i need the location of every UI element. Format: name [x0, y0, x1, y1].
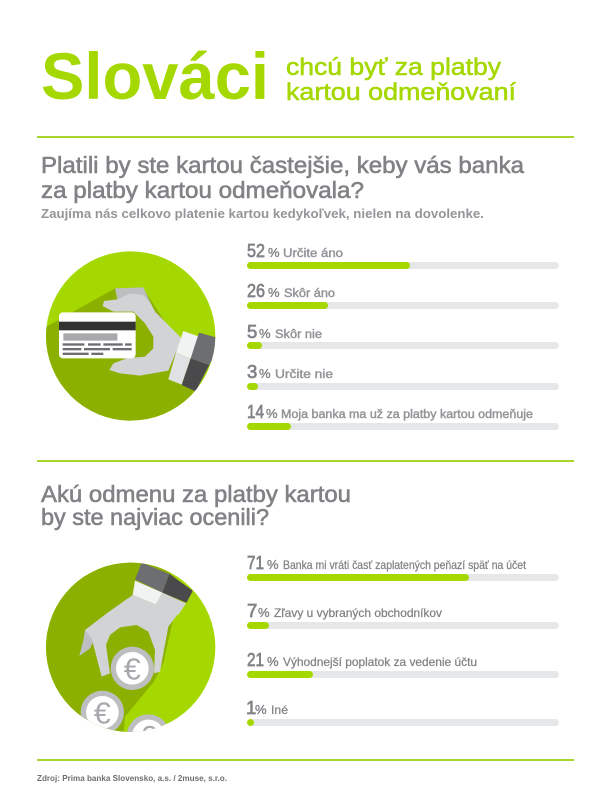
icon: euro coin 3: [127, 714, 166, 732]
icon: euro coin 2: €: [94, 696, 111, 730]
bar: 3 % Určite nie: 3: [247, 361, 257, 382]
chart: question 1 results: [247, 240, 559, 430]
bar: 26 % Skôr áno: Skôr áno: [284, 288, 335, 300]
bar: 1 % Iné: 1: [246, 697, 256, 718]
bar: 52 % Určite áno: 52: [247, 240, 265, 261]
bar: 7 % Zľavy u vybraných obchodníkov: %: [258, 605, 270, 620]
bar: 7 % Zľavy u vybraných obchodníkov: Zľavy u vybraných obchodníkov: [274, 606, 442, 620]
icon: hand holding card: [46, 251, 216, 421]
title: kartou odmeňovaní: [286, 79, 516, 106]
bar: 71 % Banka mi vráti časť zaplatených peňazí späť na účet: %: [267, 557, 279, 572]
bar: 14 % Moja banka ma už za platby kartou odmeňuje: Moja banka ma už za platby kartou odmeňuje: [281, 409, 533, 421]
bar: 1 % Iné: [246, 697, 559, 726]
bar: 7 % Zľavy u vybraných obchodníkov: 7: [247, 600, 257, 621]
source note: Zdroj: Prima banka Slovensko, a.s. / 2muse, s.r.o.: [37, 773, 227, 783]
bar: 3 % Určite nie: [247, 361, 559, 390]
bar: 1 % Iné: %: [255, 702, 267, 717]
subheading: question 1 note: Zaujíma nás celkovo platenie kartou kedykoľvek, nielen na dovolenke.: [41, 206, 484, 221]
heading: question 2: Akú odmenu za platby kartou: [41, 481, 351, 507]
heading: question 2: by ste najviac ocenili?: [41, 504, 269, 530]
bar: 21 % Výhodnejší poplatok za vedenie účtu: Výhodnejší poplatok za vedenie účtu: [283, 655, 477, 669]
bar: 52 % Určite áno: [247, 240, 559, 269]
heading: question 1: [41, 152, 525, 203]
title: chcú byť za platby: [286, 54, 501, 81]
heading: question 1: Platili by ste kartou častejšie, keby vás banka: [41, 152, 525, 178]
bar: 5 % Skôr nie: [247, 321, 559, 349]
bar: 3 % Určite nie: %: [259, 366, 271, 381]
title: Slováci: [41, 39, 269, 113]
bar: 5 % Skôr nie: %: [259, 326, 271, 341]
icon: euro coin 1: €: [124, 652, 141, 686]
title: [41, 39, 516, 113]
bar: 3 % Určite nie: Určite nie: [275, 369, 333, 381]
bar: 71 % Banka mi vráti časť zaplatených peňazí späť na účet: Banka mi vráti časť zaplatených peňazí späť na účet: [283, 558, 527, 572]
bar: 5 % Skôr nie: Skôr nie: [275, 329, 322, 341]
bar: 14 % Moja banka ma už za platby kartou odmeňuje: [247, 401, 559, 430]
icon: hand dropping euro coins: [46, 562, 216, 732]
bar: 52 % Určite áno: Určite áno: [283, 248, 343, 260]
bar: 26 % Skôr áno: %: [268, 285, 280, 300]
bar: 7 % Zľavy u vybraných obchodníkov: [247, 600, 559, 629]
bar: 21 % Výhodnejší poplatok za vedenie účtu: 21: [247, 649, 264, 670]
chart: question 2 results: [246, 552, 559, 726]
heading: question 2: [41, 481, 351, 530]
bar: 71 % Banka mi vráti časť zaplatených peňazí späť na účet: 71: [247, 552, 264, 573]
bar: 14 % Moja banka ma už za platby kartou odmeňuje: %: [266, 406, 278, 421]
bar: 26 % Skôr áno: [247, 280, 559, 309]
bar: 21 % Výhodnejší poplatok za vedenie účtu: [247, 649, 559, 678]
bar: 71 % Banka mi vráti časť zaplatených peňazí späť na účet: [247, 552, 559, 581]
bar: 5 % Skôr nie: 5: [247, 321, 257, 342]
icon: euro coin 2: [81, 691, 124, 734]
bar: 21 % Výhodnejší poplatok za vedenie účtu: %: [267, 654, 279, 669]
icon: euro coin 3: €: [140, 720, 157, 754]
bar: 26 % Skôr áno: 26: [247, 280, 265, 301]
icon: euro coin 1: [111, 647, 154, 690]
bar: 14 % Moja banka ma už za platby kartou odmeňuje: 14: [247, 401, 264, 422]
heading: question 1: za platby kartou odmeňovala?: [41, 177, 364, 203]
bar: 52 % Určite áno: %: [268, 245, 280, 260]
bar: 1 % Iné: Iné: [271, 703, 288, 717]
